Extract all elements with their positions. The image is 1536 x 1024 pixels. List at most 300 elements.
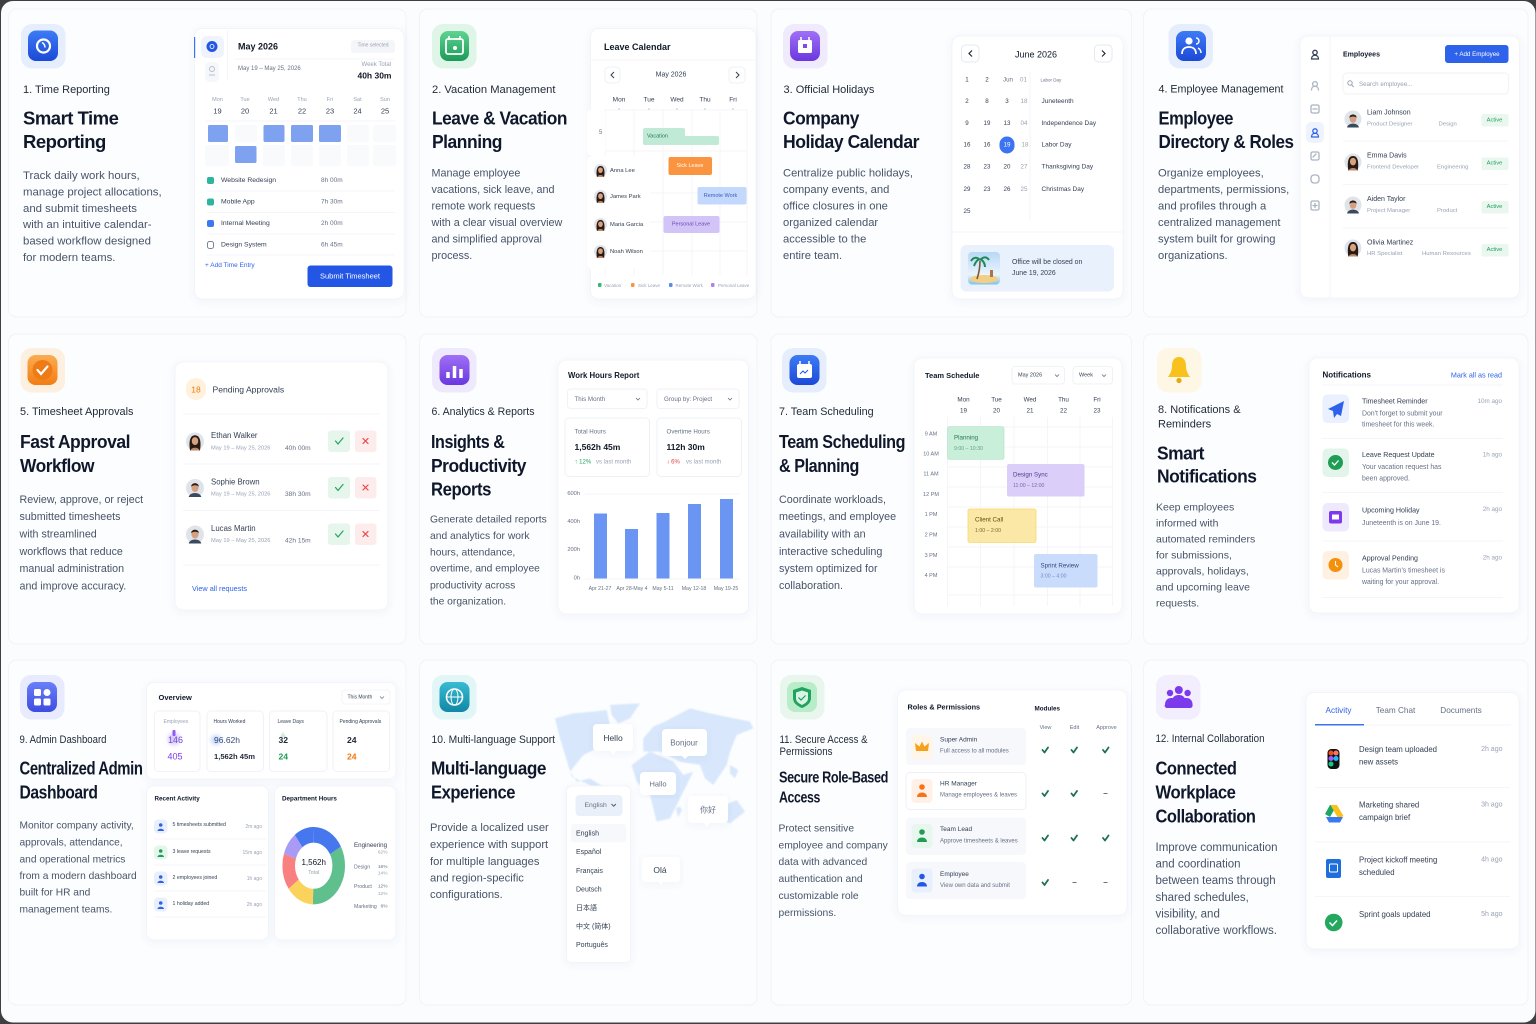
overview mockup: 24 bbox=[278, 752, 288, 762]
employee directory mockup: Human Resources bbox=[1422, 251, 1471, 257]
bar chart bbox=[567, 491, 740, 592]
description: authentication and bbox=[778, 874, 863, 885]
notifications mockup: 1h ago bbox=[1483, 452, 1502, 458]
approvals mockup: Pending Approvals bbox=[212, 384, 284, 394]
heading bbox=[779, 770, 888, 806]
employee directory mockup: Active bbox=[1487, 247, 1502, 253]
description: experience with support bbox=[430, 839, 549, 851]
description: process. bbox=[432, 250, 472, 262]
leave calendar mockup: Tue bbox=[644, 96, 655, 104]
department hours mockup: 62% bbox=[378, 850, 388, 856]
description: system built for growing bbox=[1158, 234, 1276, 246]
leave calendar mockup: Mon bbox=[613, 96, 626, 104]
panel: analytics and reports bbox=[420, 334, 757, 644]
timesheet mockup: 2h 00m bbox=[321, 220, 343, 227]
team schedule mockup: 9 AM bbox=[925, 432, 938, 438]
panel: timesheet approvals bbox=[8, 334, 406, 644]
recent activity mockup: 2 employees joined bbox=[172, 875, 217, 881]
timesheet mockup: Mobile App bbox=[221, 198, 255, 206]
kicker bbox=[780, 734, 868, 758]
speech bubbles: Hallo bbox=[649, 780, 667, 788]
overview mockup: 146 bbox=[168, 735, 183, 745]
holiday calendar mockup: Independence Day bbox=[1042, 120, 1097, 127]
description: approvals, holidays, bbox=[1156, 566, 1249, 578]
team schedule mockup: Week bbox=[1079, 372, 1093, 378]
description bbox=[778, 824, 889, 919]
language selector: English bbox=[584, 802, 607, 809]
employee directory mockup: Liam Johnson bbox=[1367, 110, 1411, 116]
overview mockup: 405 bbox=[168, 752, 183, 762]
overview mockup: 24 bbox=[347, 752, 357, 762]
holiday calendar mockup bbox=[952, 36, 1123, 299]
panel: employee management bbox=[1144, 9, 1528, 317]
panel: secure access bbox=[771, 660, 1132, 1005]
heading: Secure Role-Based bbox=[779, 770, 888, 786]
employee directory mockup bbox=[1300, 36, 1520, 298]
bar chart: May 12-18 bbox=[682, 586, 706, 592]
holiday calendar mockup: Thanksgiving Day bbox=[1042, 164, 1094, 170]
collaboration mockup bbox=[1306, 692, 1519, 949]
overview mockup bbox=[146, 682, 396, 779]
timesheet mockup: 7h 30m bbox=[321, 198, 343, 206]
bar chart: May 5-11 bbox=[652, 586, 674, 592]
kicker: 1. Time Reporting bbox=[23, 84, 110, 96]
department hours mockup: 6% bbox=[381, 904, 388, 910]
timesheet mockup: Tue bbox=[240, 97, 250, 103]
legend bbox=[598, 283, 750, 288]
approvals mockup: Sophie Brown bbox=[211, 478, 260, 486]
description bbox=[1156, 842, 1278, 937]
team schedule mockup: 19 bbox=[960, 408, 967, 414]
collaboration mockup: 3h ago bbox=[1481, 802, 1503, 808]
panel: time reporting bbox=[8, 9, 406, 317]
recent activity mockup: 1h ago bbox=[247, 876, 262, 882]
description: vacations, sick leave, and bbox=[432, 184, 555, 196]
heading: Productivity bbox=[431, 455, 527, 476]
icon: purple calendar bbox=[783, 24, 828, 68]
notifications mockup: Upcoming Holiday bbox=[1362, 506, 1420, 514]
holiday calendar mockup: 2 bbox=[965, 98, 969, 105]
speech bubbles bbox=[593, 724, 728, 885]
department hours mockup: Product bbox=[354, 884, 372, 890]
employee directory mockup: Design bbox=[1438, 122, 1457, 128]
language selector: English bbox=[576, 830, 599, 838]
timesheet mockup: Internal Meeting bbox=[221, 220, 270, 227]
icon: blue schedule bbox=[782, 348, 826, 392]
description: based workflow designed bbox=[23, 236, 151, 248]
kicker: 9. Admin Dashboard bbox=[20, 734, 106, 746]
work hours report mockup bbox=[558, 360, 748, 614]
collaboration mockup: Documents bbox=[1440, 706, 1482, 715]
kicker: 7. Team Scheduling bbox=[779, 406, 874, 418]
overview mockup: Hours Worked bbox=[214, 719, 246, 725]
department hours mockup bbox=[274, 786, 396, 940]
timesheet mockup: Design System bbox=[221, 242, 267, 248]
roles and permissions mockup: Employee bbox=[940, 871, 969, 878]
description: meetings, and employee bbox=[779, 511, 896, 523]
description: and submit timesheets bbox=[23, 203, 137, 215]
description: and coordination bbox=[1156, 858, 1241, 870]
timesheet mockup: 40h 30m bbox=[357, 70, 392, 80]
team schedule mockup: May 2026 bbox=[1018, 372, 1042, 378]
bar chart: Apr 28-May 4 bbox=[616, 586, 648, 592]
speech bubbles: Hello bbox=[603, 733, 623, 743]
collaboration mockup: Activity bbox=[1326, 706, 1352, 715]
heading: Centralized Admin bbox=[20, 758, 143, 778]
notifications mockup: waiting for your approval. bbox=[1361, 579, 1439, 586]
heading: Collaboration bbox=[1156, 806, 1256, 826]
icon: drive bbox=[1325, 805, 1344, 822]
description: and simplified approval bbox=[432, 234, 542, 246]
schedule events: 1:00 – 2:00 bbox=[975, 528, 1001, 534]
timesheet mockup: 20 bbox=[241, 106, 249, 116]
work hours report mockup: Group by: Project bbox=[664, 396, 712, 403]
holiday calendar mockup: 3 bbox=[1005, 98, 1009, 105]
overview mockup: 96.62h bbox=[214, 735, 240, 745]
work hours report mockup: 112h 30m bbox=[666, 442, 705, 452]
panel: vacation management bbox=[420, 9, 757, 317]
timesheet mockup: + Add Time Entry bbox=[205, 262, 255, 269]
description: with streamlined bbox=[18, 528, 97, 540]
panel: admin dashboard bbox=[8, 660, 406, 1005]
holiday calendar mockup: 28 bbox=[964, 164, 971, 170]
description: Generate detailed reports bbox=[430, 514, 547, 526]
department hours mockup: 1,562h bbox=[301, 858, 326, 867]
heading bbox=[23, 108, 119, 152]
description: productivity across bbox=[430, 580, 515, 592]
kicker: 3. Official Holidays bbox=[784, 84, 875, 96]
holiday calendar mockup: 16 bbox=[964, 142, 971, 148]
work hours report mockup: This Month bbox=[574, 396, 606, 403]
team schedule mockup: Tue bbox=[991, 396, 1002, 404]
kicker: 2. Vacation Management bbox=[432, 84, 556, 96]
description: Monitor company activity, bbox=[20, 820, 134, 832]
heading: Reports bbox=[431, 478, 491, 500]
overview mockup: 32 bbox=[278, 735, 288, 745]
description: interactive scheduling bbox=[779, 546, 882, 558]
notifications mockup: been approved. bbox=[1362, 476, 1410, 482]
kicker: Reminders bbox=[1158, 418, 1212, 430]
description: with an intuitive calendar- bbox=[22, 219, 152, 231]
overview mockup: Pending Approvals bbox=[340, 719, 382, 725]
department hours mockup: 12% bbox=[378, 884, 388, 890]
leave calendar mockup: Fri bbox=[729, 96, 737, 104]
approvals mockup: 42h 15m bbox=[285, 538, 311, 544]
recent activity mockup: Recent Activity bbox=[154, 796, 200, 802]
overview mockup: Employees bbox=[164, 719, 189, 725]
description: configurations. bbox=[430, 889, 503, 901]
overview mockup: Leave Days bbox=[278, 719, 304, 725]
language selector: 日本語 bbox=[576, 903, 597, 912]
schedule events: Sprint Review bbox=[1040, 562, 1079, 570]
icon: purple bar chart bbox=[432, 348, 476, 392]
leave calendar mockup bbox=[587, 28, 756, 299]
description: Review, approve, or reject bbox=[20, 494, 143, 506]
employee directory mockup: Employees bbox=[1343, 52, 1380, 58]
holiday calendar mockup: 23 bbox=[984, 164, 991, 170]
description bbox=[430, 168, 563, 262]
timesheet mockup: Time selected bbox=[358, 42, 389, 48]
description: and region-specific bbox=[430, 872, 524, 884]
approvals mockup: Ethan Walker bbox=[211, 431, 258, 440]
collaboration mockup: Marketing shared bbox=[1359, 800, 1419, 810]
work hours report mockup: ↓ 6% bbox=[666, 460, 681, 466]
approvals mockup: May 19 – May 25, 2026 bbox=[211, 446, 270, 452]
department hours mockup: Department Hours bbox=[282, 796, 337, 802]
team schedule mockup: 23 bbox=[1093, 408, 1101, 414]
heading: Multi-language bbox=[431, 758, 546, 778]
description: availability with an bbox=[779, 528, 866, 540]
holiday calendar mockup: Labor Day bbox=[1042, 142, 1072, 148]
schedule events: Planning bbox=[954, 434, 979, 442]
schedule events: 3:00 – 4:00 bbox=[1040, 574, 1067, 580]
description: Protect sensitive bbox=[778, 824, 854, 834]
description bbox=[779, 494, 896, 592]
leave calendar mockup: Thu bbox=[699, 96, 711, 104]
heading: Access bbox=[779, 790, 820, 806]
schedule events: 11:00 – 12:00 bbox=[1013, 483, 1044, 489]
department hours mockup: Engineering bbox=[354, 842, 388, 849]
team schedule mockup: 12 PM bbox=[923, 492, 939, 498]
heading: Reporting bbox=[23, 131, 106, 152]
holiday calendar mockup: 19 bbox=[984, 120, 991, 127]
department hours mockup: 12% bbox=[378, 891, 388, 897]
permission checks bbox=[1042, 748, 1108, 885]
bar chart: 0h bbox=[574, 576, 580, 582]
employee directory mockup: Aiden Taylor bbox=[1367, 196, 1406, 203]
kicker: 6. Analytics & Reports bbox=[432, 406, 535, 418]
work hours report mockup: Overtime Hours bbox=[666, 428, 710, 436]
icon: green check bbox=[1325, 914, 1342, 931]
panel: team scheduling bbox=[771, 334, 1132, 644]
heading: Notifications bbox=[1157, 466, 1257, 486]
notifications mockup: Approval Pending bbox=[1362, 554, 1418, 562]
heading bbox=[20, 758, 143, 802]
description: and upcoming leave bbox=[1156, 582, 1250, 594]
team schedule mockup: 11 AM bbox=[923, 472, 939, 478]
panel: multi-language support bbox=[420, 660, 757, 1005]
timesheet mockup: 21 bbox=[269, 106, 278, 116]
description: entire team. bbox=[783, 250, 842, 262]
description: office closures in one bbox=[783, 200, 888, 212]
holiday calendar mockup: 26 bbox=[1004, 186, 1011, 193]
schedule events: 9:00 – 10:30 bbox=[954, 446, 983, 452]
leave calendar mockup: Leave Calendar bbox=[604, 42, 671, 52]
name list: Noah Wilson bbox=[610, 249, 643, 255]
recent activity mockup: 15m ago bbox=[243, 850, 262, 856]
description: collaborative workflows. bbox=[1156, 925, 1277, 937]
team schedule mockup: Team Schedule bbox=[925, 371, 979, 380]
description: organizations. bbox=[1158, 250, 1228, 262]
employee directory mockup: Active bbox=[1487, 204, 1502, 210]
name list: Anna Lee bbox=[610, 168, 635, 174]
collaboration mockup: Design team uploaded bbox=[1359, 745, 1437, 754]
bar chart: May 19-25 bbox=[714, 586, 738, 592]
approvals mockup: Lucas Martin bbox=[211, 524, 256, 533]
department hours mockup: 16% bbox=[378, 864, 388, 870]
icon: blue people bbox=[1168, 24, 1213, 68]
roles and permissions mockup: Approve bbox=[1096, 725, 1117, 731]
timesheet mockup: Mon bbox=[212, 97, 223, 103]
heading: Dashboard bbox=[20, 782, 98, 802]
description: hours, attendance, bbox=[430, 548, 515, 558]
description: centralized management bbox=[1158, 217, 1281, 229]
heading bbox=[431, 431, 527, 500]
team schedule mockup: 4 PM bbox=[925, 573, 938, 579]
language selector: Português bbox=[576, 942, 608, 949]
heading: & Planning bbox=[779, 455, 859, 476]
heading bbox=[1156, 758, 1256, 826]
approvals mockup: 38h 30m bbox=[285, 491, 311, 498]
holiday calendar mockup: June 2026 bbox=[1015, 50, 1057, 60]
description: accessible to the bbox=[783, 234, 866, 246]
roles and permissions mockup: Edit bbox=[1070, 725, 1080, 731]
schedule events bbox=[948, 426, 1098, 588]
kicker: 10. Multi-language Support bbox=[432, 734, 555, 746]
collaboration mockup: 5h ago bbox=[1481, 911, 1503, 918]
approvals mockup: 40h 00m bbox=[285, 445, 311, 452]
description: for modern teams. bbox=[23, 252, 115, 264]
description: collaboration. bbox=[779, 580, 843, 592]
timesheet mockup: Week Total bbox=[362, 62, 391, 68]
speech bubbles: Olá bbox=[653, 865, 667, 875]
description: the organization. bbox=[430, 596, 506, 608]
notifications mockup: Don't forget to submit your bbox=[1362, 410, 1443, 418]
employee directory mockup: Olivia Martinez bbox=[1367, 240, 1414, 246]
notifications mockup: Juneteenth is on June 19. bbox=[1362, 520, 1441, 527]
legend: Remote Work bbox=[676, 283, 704, 288]
timesheet mockup: 24 bbox=[353, 106, 362, 116]
team schedule mockup: 22 bbox=[1060, 408, 1067, 414]
collaboration mockup: 4h ago bbox=[1481, 856, 1503, 864]
team schedule mockup: Thu bbox=[1058, 396, 1069, 404]
employee directory mockup: Engineering bbox=[1437, 164, 1468, 170]
work hours report mockup: vs last month bbox=[686, 460, 721, 466]
leave bars: Remote Work bbox=[704, 193, 738, 199]
kicker: 11. Secure Access & bbox=[780, 734, 868, 746]
heading: Holiday Calendar bbox=[783, 131, 919, 152]
roles and permissions mockup: Modules bbox=[1034, 706, 1061, 712]
description: approvals, attendance, bbox=[20, 838, 123, 848]
description: Keep employees bbox=[1156, 502, 1234, 514]
heading: Team Scheduling bbox=[779, 431, 905, 452]
timesheet mockup: 22 bbox=[298, 106, 306, 116]
timesheet mockup: Sun bbox=[380, 97, 390, 103]
description bbox=[18, 494, 143, 592]
collaboration mockup: 2h ago bbox=[1481, 746, 1503, 753]
holiday calendar mockup: 16 bbox=[984, 142, 991, 148]
description: submitted timesheets bbox=[20, 511, 120, 523]
timesheet mockup: Sat bbox=[353, 97, 362, 103]
description: data with advanced bbox=[778, 857, 868, 868]
heading: Planning bbox=[432, 131, 502, 152]
heading bbox=[20, 431, 130, 476]
team schedule mockup: 21 bbox=[1026, 408, 1034, 414]
leave bars: Sick Leave bbox=[677, 163, 703, 169]
description: company events, and bbox=[783, 184, 889, 196]
recent activity mockup: 2h ago bbox=[247, 902, 262, 908]
description: built for HR and bbox=[20, 888, 91, 898]
timesheet mockup: Wed bbox=[268, 97, 279, 103]
collaboration mockup: scheduled bbox=[1359, 868, 1395, 877]
collaboration mockup: Team Chat bbox=[1376, 706, 1416, 715]
donut chart bbox=[289, 835, 339, 897]
recent activity mockup: 3 leave requests bbox=[172, 849, 211, 855]
employee directory mockup: Project Manager bbox=[1367, 208, 1410, 214]
collaboration mockup: campaign brief bbox=[1359, 813, 1411, 822]
notifications mockup: Leave Request Update bbox=[1362, 451, 1435, 459]
timesheet mockup: 8h 00m bbox=[321, 177, 343, 184]
description: employee and company bbox=[778, 840, 889, 852]
approvals mockup bbox=[175, 362, 388, 610]
description: Coordinate workloads, bbox=[779, 494, 886, 506]
team schedule mockup: 1 PM bbox=[925, 512, 938, 518]
kicker: 5. Timesheet Approvals bbox=[20, 406, 134, 418]
description bbox=[1156, 502, 1255, 610]
heading bbox=[431, 758, 546, 802]
team schedule mockup bbox=[914, 358, 1122, 614]
leave bars: Personal Leave bbox=[672, 222, 710, 228]
team schedule mockup: Mon bbox=[957, 396, 970, 404]
heading: Employee bbox=[1158, 108, 1233, 128]
description bbox=[22, 170, 162, 264]
overview mockup: This Month bbox=[348, 694, 372, 700]
description: Improve communication bbox=[1156, 842, 1278, 854]
collaboration mockup: Project kickoff meeting bbox=[1359, 856, 1437, 864]
description: and improve accuracy. bbox=[20, 580, 126, 592]
notifications mockup: Lucas Martin's timesheet is bbox=[1362, 568, 1445, 574]
kicker: Permissions bbox=[780, 746, 833, 758]
work hours report mockup: vs last month bbox=[596, 460, 631, 466]
employee directory mockup: + Add Employee bbox=[1454, 51, 1500, 58]
notifications mockup: Notifications bbox=[1322, 370, 1371, 380]
icon: people group bbox=[1156, 675, 1200, 720]
heading: Leave & Vacation bbox=[432, 108, 567, 128]
overview mockup: 1,562h 45m bbox=[214, 752, 255, 761]
timesheet mockup: 6h 45m bbox=[321, 242, 343, 248]
bar chart: 200h bbox=[567, 547, 580, 553]
leave bars: Vacation bbox=[647, 134, 668, 140]
approvals mockup: May 19 – May 25, 2026 bbox=[211, 538, 270, 544]
language selector bbox=[566, 786, 630, 962]
description: shared schedules, bbox=[1156, 892, 1249, 904]
department hours mockup: Total bbox=[308, 870, 319, 876]
description: permissions. bbox=[778, 908, 836, 919]
notifications mockup: 2h ago bbox=[1483, 506, 1502, 513]
employee directory mockup: Product Designer bbox=[1367, 122, 1413, 128]
holiday calendar mockup: Juneteenth bbox=[1042, 98, 1074, 105]
panel: internal collaboration bbox=[1144, 660, 1528, 1005]
employee directory mockup: HR Specialist bbox=[1367, 251, 1403, 257]
approvals mockup: View all requests bbox=[192, 584, 247, 593]
language selector: Deutsch bbox=[576, 886, 602, 894]
heading bbox=[1157, 442, 1257, 486]
panel: notifications bbox=[1144, 334, 1528, 644]
bar chart: Apr 21-27 bbox=[589, 586, 611, 592]
description: for multiple languages bbox=[430, 856, 540, 868]
description: and profiles through a bbox=[1158, 200, 1267, 212]
timesheet mockup: Submit Timesheet bbox=[320, 272, 381, 280]
recent activity mockup: 5 timesheets submitted bbox=[172, 822, 226, 828]
holiday calendar mockup: 13 bbox=[1004, 120, 1011, 127]
description: system optimized for bbox=[779, 563, 878, 575]
timesheet mockup: May 2026 bbox=[238, 42, 278, 52]
description: Manage employee bbox=[432, 168, 520, 180]
description: management teams. bbox=[20, 904, 112, 916]
notifications mockup: 10m ago bbox=[1477, 398, 1502, 405]
heading: Workflow bbox=[20, 455, 95, 476]
department hours mockup: 14% bbox=[378, 870, 388, 876]
